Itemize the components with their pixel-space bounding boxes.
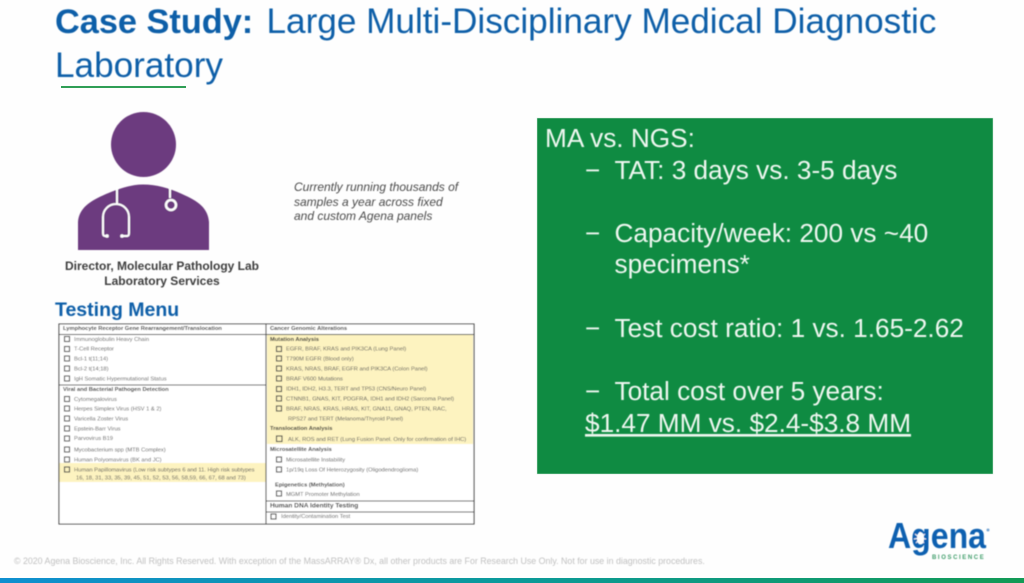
right column: cancer genomic alterations: ALK, ROS and RET (Lung Fusion Panel. Only for confirmation of IHC) [288, 437, 466, 443]
panel text: − [585, 376, 600, 406]
panel text: − [585, 218, 600, 248]
footer gradient bar [0, 578, 1024, 583]
panel text: Capacity/week: 200 vs ~40 [614, 218, 928, 248]
panel text: $1.47 MM vs. $2.4-$3.8 MM [585, 408, 911, 438]
note: sample volume: and custom Agena panels [294, 209, 432, 223]
right column: cancer genomic alterations: BRAF V600 Mutations [286, 376, 343, 382]
right column: cancer genomic alterations: IDH1, IDH2, H3.3, TERT and TP53 (CNS/Neuro Panel) [286, 386, 426, 392]
panel text: − [585, 313, 600, 343]
left column: lymphocyte and pathogen tests: T-Cell Receptor [74, 346, 114, 352]
left column: lymphocyte and pathogen tests: Immunoglobulin Heavy Chain [74, 337, 149, 343]
panel text: − [585, 155, 600, 185]
testing menu table [59, 324, 474, 524]
panel text: specimens* [614, 249, 750, 279]
title [55, 2, 936, 85]
director label: Laboratory Services [104, 274, 220, 288]
left column: lymphocyte and pathogen tests: Bcl-1 t(11;14) [74, 356, 108, 362]
panel text: Test cost ratio: 1 vs. 1.65-2.62 [614, 313, 964, 343]
panel text: TAT: 3 days vs. 3-5 days [614, 155, 897, 185]
left column: lymphocyte and pathogen tests: Varicella Zoster Virus [74, 416, 128, 422]
panel text [545, 123, 964, 438]
left column: lymphocyte and pathogen tests: Herpes Simplex Virus (HSV 1 & 2) [74, 406, 162, 412]
right column: cancer genomic alterations: Microsatellite Instability [286, 458, 345, 464]
left column: lymphocyte and pathogen tests: Epstein-Barr Virus [74, 426, 121, 432]
left column: lymphocyte and pathogen tests: Bcl-2 t(14;18) [74, 366, 109, 372]
note: sample volume: samples a year across fixed [294, 195, 443, 209]
title: Case Study: [55, 3, 253, 41]
director label: Director, Molecular Pathology Lab [65, 259, 259, 273]
left column: lymphocyte and pathogen tests: IgH Somatic Hypermutational Status [74, 376, 167, 382]
left column: lymphocyte and pathogen tests: Cytomegalovirus [74, 397, 117, 403]
right column: cancer genomic alterations [270, 326, 466, 520]
panel: MA vs NGS comparison [537, 118, 993, 474]
right column: cancer genomic alterations: T790M EGFR (Blood only) [286, 356, 354, 362]
left column: lymphocyte and pathogen tests: Parvovirus B19 [74, 436, 113, 442]
right column: cancer genomic alterations: Mutation Analysis [270, 337, 319, 343]
title underline [61, 86, 186, 88]
footer copyright: © 2020 Agena Bioscience, Inc. All Rights Reserved. With exception of the MassARRAY® Dx, all other products are For Research Use Only. Not for use in diagnostic procedures. [14, 556, 705, 566]
logo: Agena Bioscience: BIOSCIENCE [932, 555, 985, 561]
right column: cancer genomic alterations: Epigenetics (Methylation) [275, 482, 345, 488]
right column: cancer genomic alterations: Microsatellite Analysis [270, 447, 332, 453]
title: Laboratory [55, 46, 223, 85]
left column: lymphocyte and pathogen tests: Lymphocyte Receptor Gene Rearrangement/Translocation [63, 326, 222, 332]
left column: lymphocyte and pathogen tests [63, 326, 255, 482]
right column: cancer genomic alterations: Cancer Genomic Alterations [270, 326, 347, 332]
left column: lymphocyte and pathogen tests: Viral and Bacterial Pathogen Detection [63, 387, 169, 393]
right column: cancer genomic alterations: Translocation Analysis [270, 426, 332, 432]
icon: doctor with stethoscope [78, 112, 209, 250]
right column: cancer genomic alterations: RPS27 and TERT (Melanoma/Thyroid Panel) [288, 416, 403, 422]
panel text: MA vs. NGS: [545, 123, 695, 153]
note: sample volume: Currently running thousands of [294, 180, 460, 194]
right column: cancer genomic alterations: EGFR, BRAF, KRAS and PIK3CA (Lung Panel) [286, 346, 406, 352]
heading: testing menu: Testing Menu [55, 299, 179, 321]
left column: lymphocyte and pathogen tests: Human Polyomavirus (BK and JC) [74, 458, 162, 464]
right column: cancer genomic alterations: 1p/19q Loss Of Heterozygosity (Oligodendroglioma) [286, 468, 418, 474]
left column: lymphocyte and pathogen tests: 16, 18, 31, 33, 35, 39, 45, 51, 52, 53, 56, 58,59, 66, 67, 68 and 73) [76, 476, 246, 482]
right column: cancer genomic alterations: MGMT Promoter Methylation [286, 492, 360, 498]
right column: cancer genomic alterations: KRAS, NRAS, BRAF, EGFR and PIK3CA (Colon Panel) [286, 366, 428, 372]
panel text: Total cost over 5 years: [614, 376, 884, 406]
logo: Agena Bioscience: Agena [888, 515, 987, 556]
left column: lymphocyte and pathogen tests: Mycobacterium spp (MTB Complex) [74, 448, 166, 454]
left column: lymphocyte and pathogen tests: Human Papillomavirus (Low risk subtypes 6 and 11. High risk subtypes [74, 468, 255, 474]
right column: cancer genomic alterations: CTNNB1, GNAS, KIT, PDGFRA, IDH1 and IDH2 (Sarcoma Panel) [286, 396, 454, 402]
right column: cancer genomic alterations: BRAF, NRAS, KRAS, HRAS, KIT, GNA11, GNAQ, PTEN, RAC, [286, 406, 447, 412]
director label [65, 259, 259, 288]
note: sample volume [294, 180, 460, 223]
right column: cancer genomic alterations: Human DNA Identity Testing [270, 502, 358, 510]
title: Large Multi-Disciplinary Medical Diagnostic [266, 2, 936, 41]
right column: cancer genomic alterations: Identity/Contamination Test [281, 514, 351, 520]
